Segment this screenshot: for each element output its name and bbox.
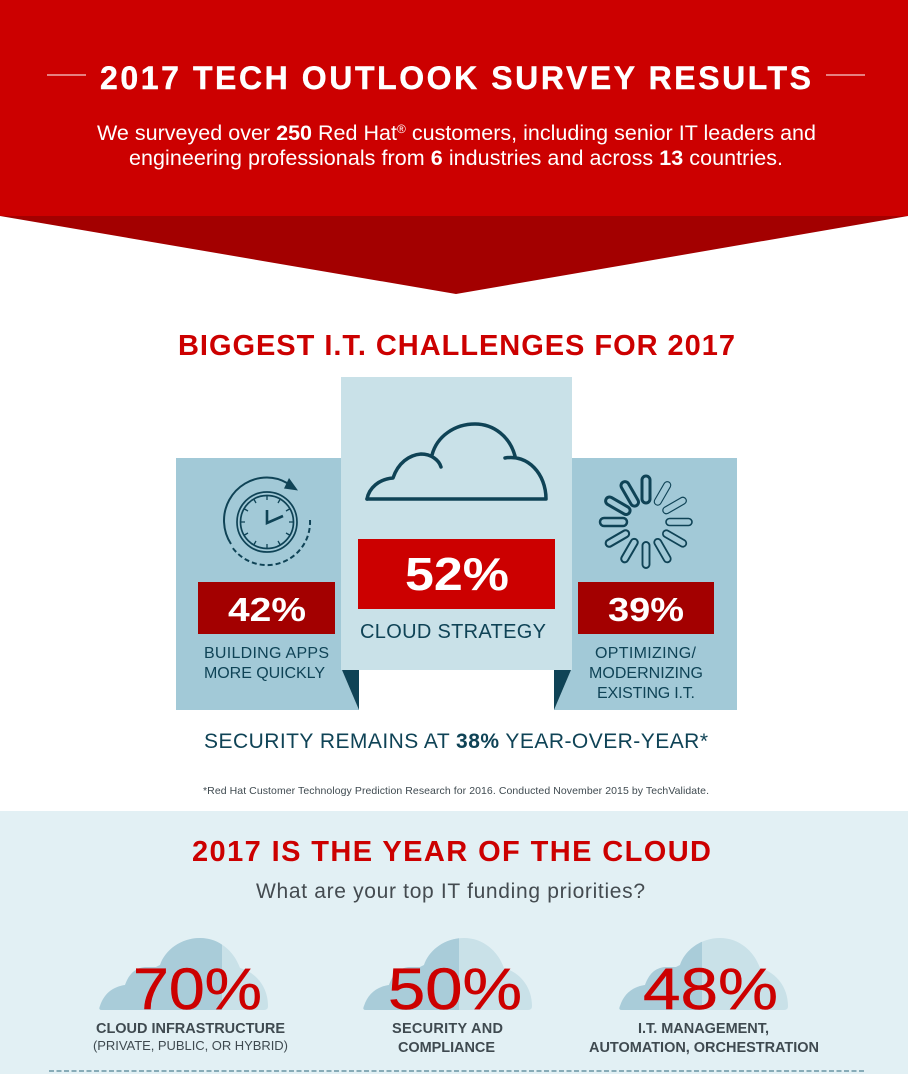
chart: 48% IT management — [589, 938, 819, 1056]
header intro text — [97, 121, 816, 170]
label: cloud infrastructure: (PRIVATE, PUBLIC, OR HYBRID) — [93, 1038, 288, 1053]
label: building apps more quickly: BUILDING APPS — [204, 645, 329, 662]
header intro text: ® — [397, 122, 406, 136]
panel: building apps — [176, 458, 359, 710]
label: cloud infrastructure — [93, 1021, 288, 1053]
security statement: SECURITY REMAINS AT 38% YEAR-OVER-YEAR* — [204, 730, 708, 753]
chart: 50% security and compliance: 50% — [388, 957, 522, 1022]
question text: What are your top IT funding priorities? — [256, 880, 645, 903]
label: optimizing modernizing existing IT: EXISTING I.T. — [597, 685, 695, 702]
panel: cloud strategy — [341, 377, 572, 670]
stat: 42%: 42% — [228, 591, 306, 628]
label: optimizing modernizing existing IT: OPTIMIZING/ — [595, 645, 697, 662]
stat: 52% — [358, 539, 555, 609]
label: optimizing modernizing existing IT — [589, 645, 703, 702]
heading: year of the cloud: 2017 IS THE YEAR OF THE CLOUD — [192, 836, 711, 868]
icon: loading spinner — [600, 476, 692, 568]
label: building apps more quickly — [204, 645, 329, 682]
stat: 39% — [578, 582, 714, 634]
label: security and compliance: SECURITY AND — [392, 1021, 503, 1037]
fold: right ribbon — [554, 670, 571, 710]
icon: clock with circular arrow — [224, 478, 310, 565]
label: IT management automation orchestration: AUTOMATION, ORCHESTRATION — [589, 1040, 819, 1056]
footnote: *Red Hat Customer Technology Prediction Research for 2016. Conducted November 2015 by TechValidate. — [203, 785, 709, 797]
label: cloud strategy: CLOUD STRATEGY — [360, 621, 546, 643]
header intro text: We surveyed over 250 Red Hat — [97, 121, 397, 145]
label: building apps more quickly: MORE QUICKLY — [204, 665, 325, 682]
header intro text: customers, including senior IT leaders and — [406, 121, 816, 145]
title: 2017 TECH OUTLOOK SURVEY RESULTS — [100, 60, 811, 96]
label: IT management automation orchestration — [589, 1021, 819, 1056]
heading: biggest IT challenges: BIGGEST I.T. CHALLENGES FOR 2017 — [178, 330, 735, 362]
chart: 70% cloud infrastructure: 70% — [133, 957, 262, 1022]
label: security and compliance — [392, 1021, 503, 1056]
stat: 52%: 52% — [405, 548, 509, 600]
stat: 39%: 39% — [608, 591, 684, 628]
label: security and compliance: COMPLIANCE — [398, 1040, 495, 1056]
label: optimizing modernizing existing IT: MODERNIZING — [589, 665, 703, 682]
label: IT management automation orchestration: I.T. MANAGEMENT, — [638, 1021, 769, 1037]
label: cloud infrastructure: CLOUD INFRASTRUCTURE — [96, 1021, 285, 1037]
chart: 50% security and compliance — [363, 938, 532, 1056]
stat: 42% — [198, 582, 335, 634]
header banner — [0, 0, 908, 294]
header intro text: engineering professionals from 6 industries and across 13 countries. — [129, 146, 783, 170]
chart: 70% cloud infrastructure — [93, 938, 288, 1053]
fold: left ribbon — [342, 670, 359, 710]
chart: 48% IT management: 48% — [643, 957, 778, 1022]
icon: cloud outline — [367, 424, 546, 499]
panel: year of the cloud — [0, 811, 908, 1074]
panel: optimizing — [554, 458, 737, 710]
